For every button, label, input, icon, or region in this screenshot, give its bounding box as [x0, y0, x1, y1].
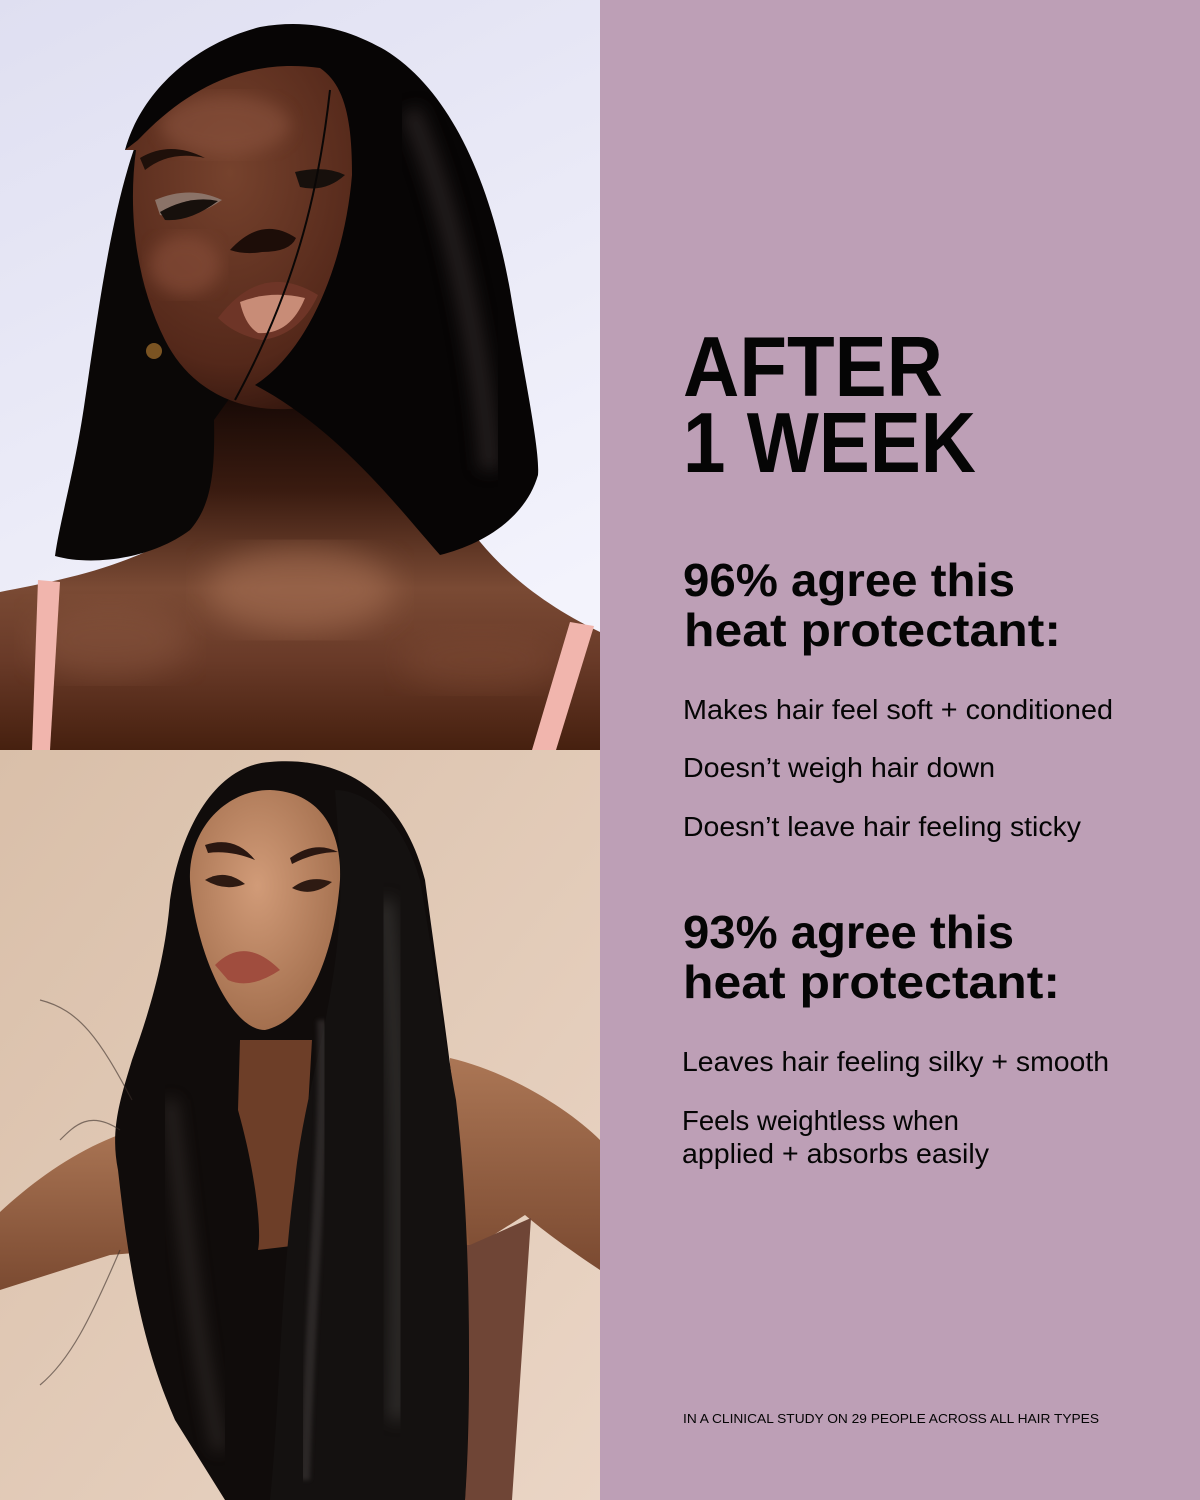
subheading: 93 percent: [683, 906, 1060, 1008]
text block: 96 percent claims: Doesn’t leave hair feeling sticky: [683, 811, 1081, 842]
subheading: 96 percent: 96% agree this: [683, 554, 1015, 606]
text block: 93 percent claims: [682, 1046, 1109, 1169]
text block: 96 percent claims: Makes hair feel soft + conditioned: [683, 694, 1113, 725]
subheading: 93 percent: heat protectant:: [683, 956, 1060, 1008]
photo: woman with long straight hair: [0, 750, 600, 1500]
text block: 93 percent claims: applied + absorbs easily: [682, 1138, 989, 1169]
text block: 93 percent claims: Leaves hair feeling silky + smooth: [682, 1046, 1109, 1077]
panel: text background: [600, 0, 1200, 1500]
subheading: 96 percent: heat protectant:: [684, 604, 1061, 656]
subheading: 93 percent: 93% agree this: [683, 906, 1014, 958]
photo: woman with black bob: [0, 0, 600, 750]
footnote: IN A CLINICAL STUDY ON 29 PEOPLE ACROSS ALL HAIR TYPES: [683, 1411, 1099, 1426]
text block: 96 percent claims: Doesn’t weigh hair down: [683, 752, 995, 783]
heading: after 1 week: AFTER: [683, 320, 943, 415]
text block: 93 percent claims: Feels weightless when: [682, 1105, 959, 1136]
subheading: 96 percent: [683, 554, 1061, 656]
text block: 96 percent claims: [683, 694, 1113, 842]
heading: after 1 week: 1 WEEK: [683, 396, 976, 491]
heading: after 1 week: [683, 320, 976, 491]
